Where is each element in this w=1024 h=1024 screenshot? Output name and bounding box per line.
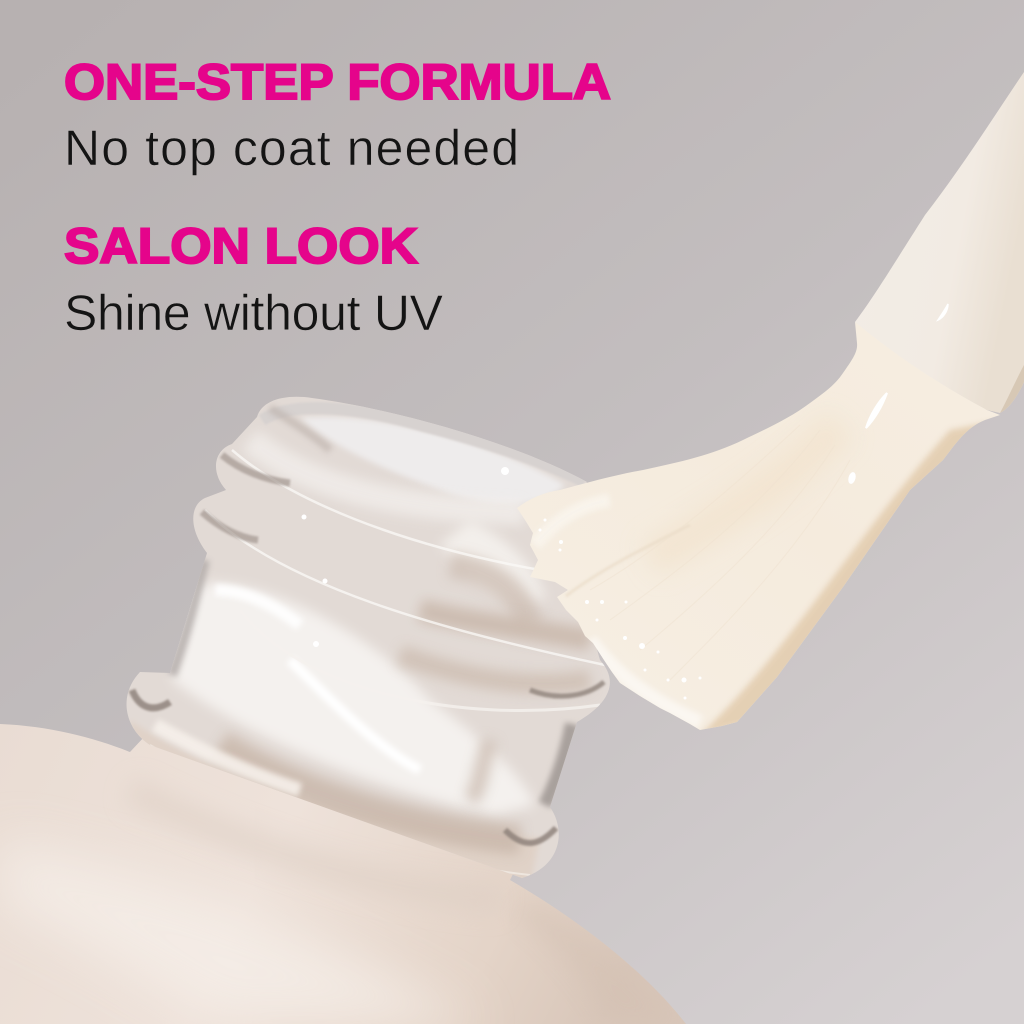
dark refractions [222,455,290,483]
beige thread bands [450,565,530,625]
heading: salon look: SALON LOOK [64,218,418,274]
collar ring [130,720,540,885]
heading: one-step formula: ONE-STEP FORMULA [64,54,611,110]
glass base [126,396,610,874]
upper thread glass [250,440,525,512]
bristles [517,322,1000,730]
glass thread highlights [232,450,540,570]
glass neck [126,396,610,878]
text: no top coat needed: No top coat needed [64,120,519,176]
bristle shading [535,420,1000,735]
bottle shoulder [0,700,700,1024]
text: shine without uv: Shine without UV [64,285,444,341]
highlights [866,393,887,428]
brush handle [855,72,1024,413]
rim opening [300,417,565,504]
sparkles [538,518,702,700]
specular dots [302,467,509,647]
brush [517,72,1024,735]
glass side edges [172,560,205,675]
bottle [0,390,700,1024]
nail polish body [172,583,535,815]
